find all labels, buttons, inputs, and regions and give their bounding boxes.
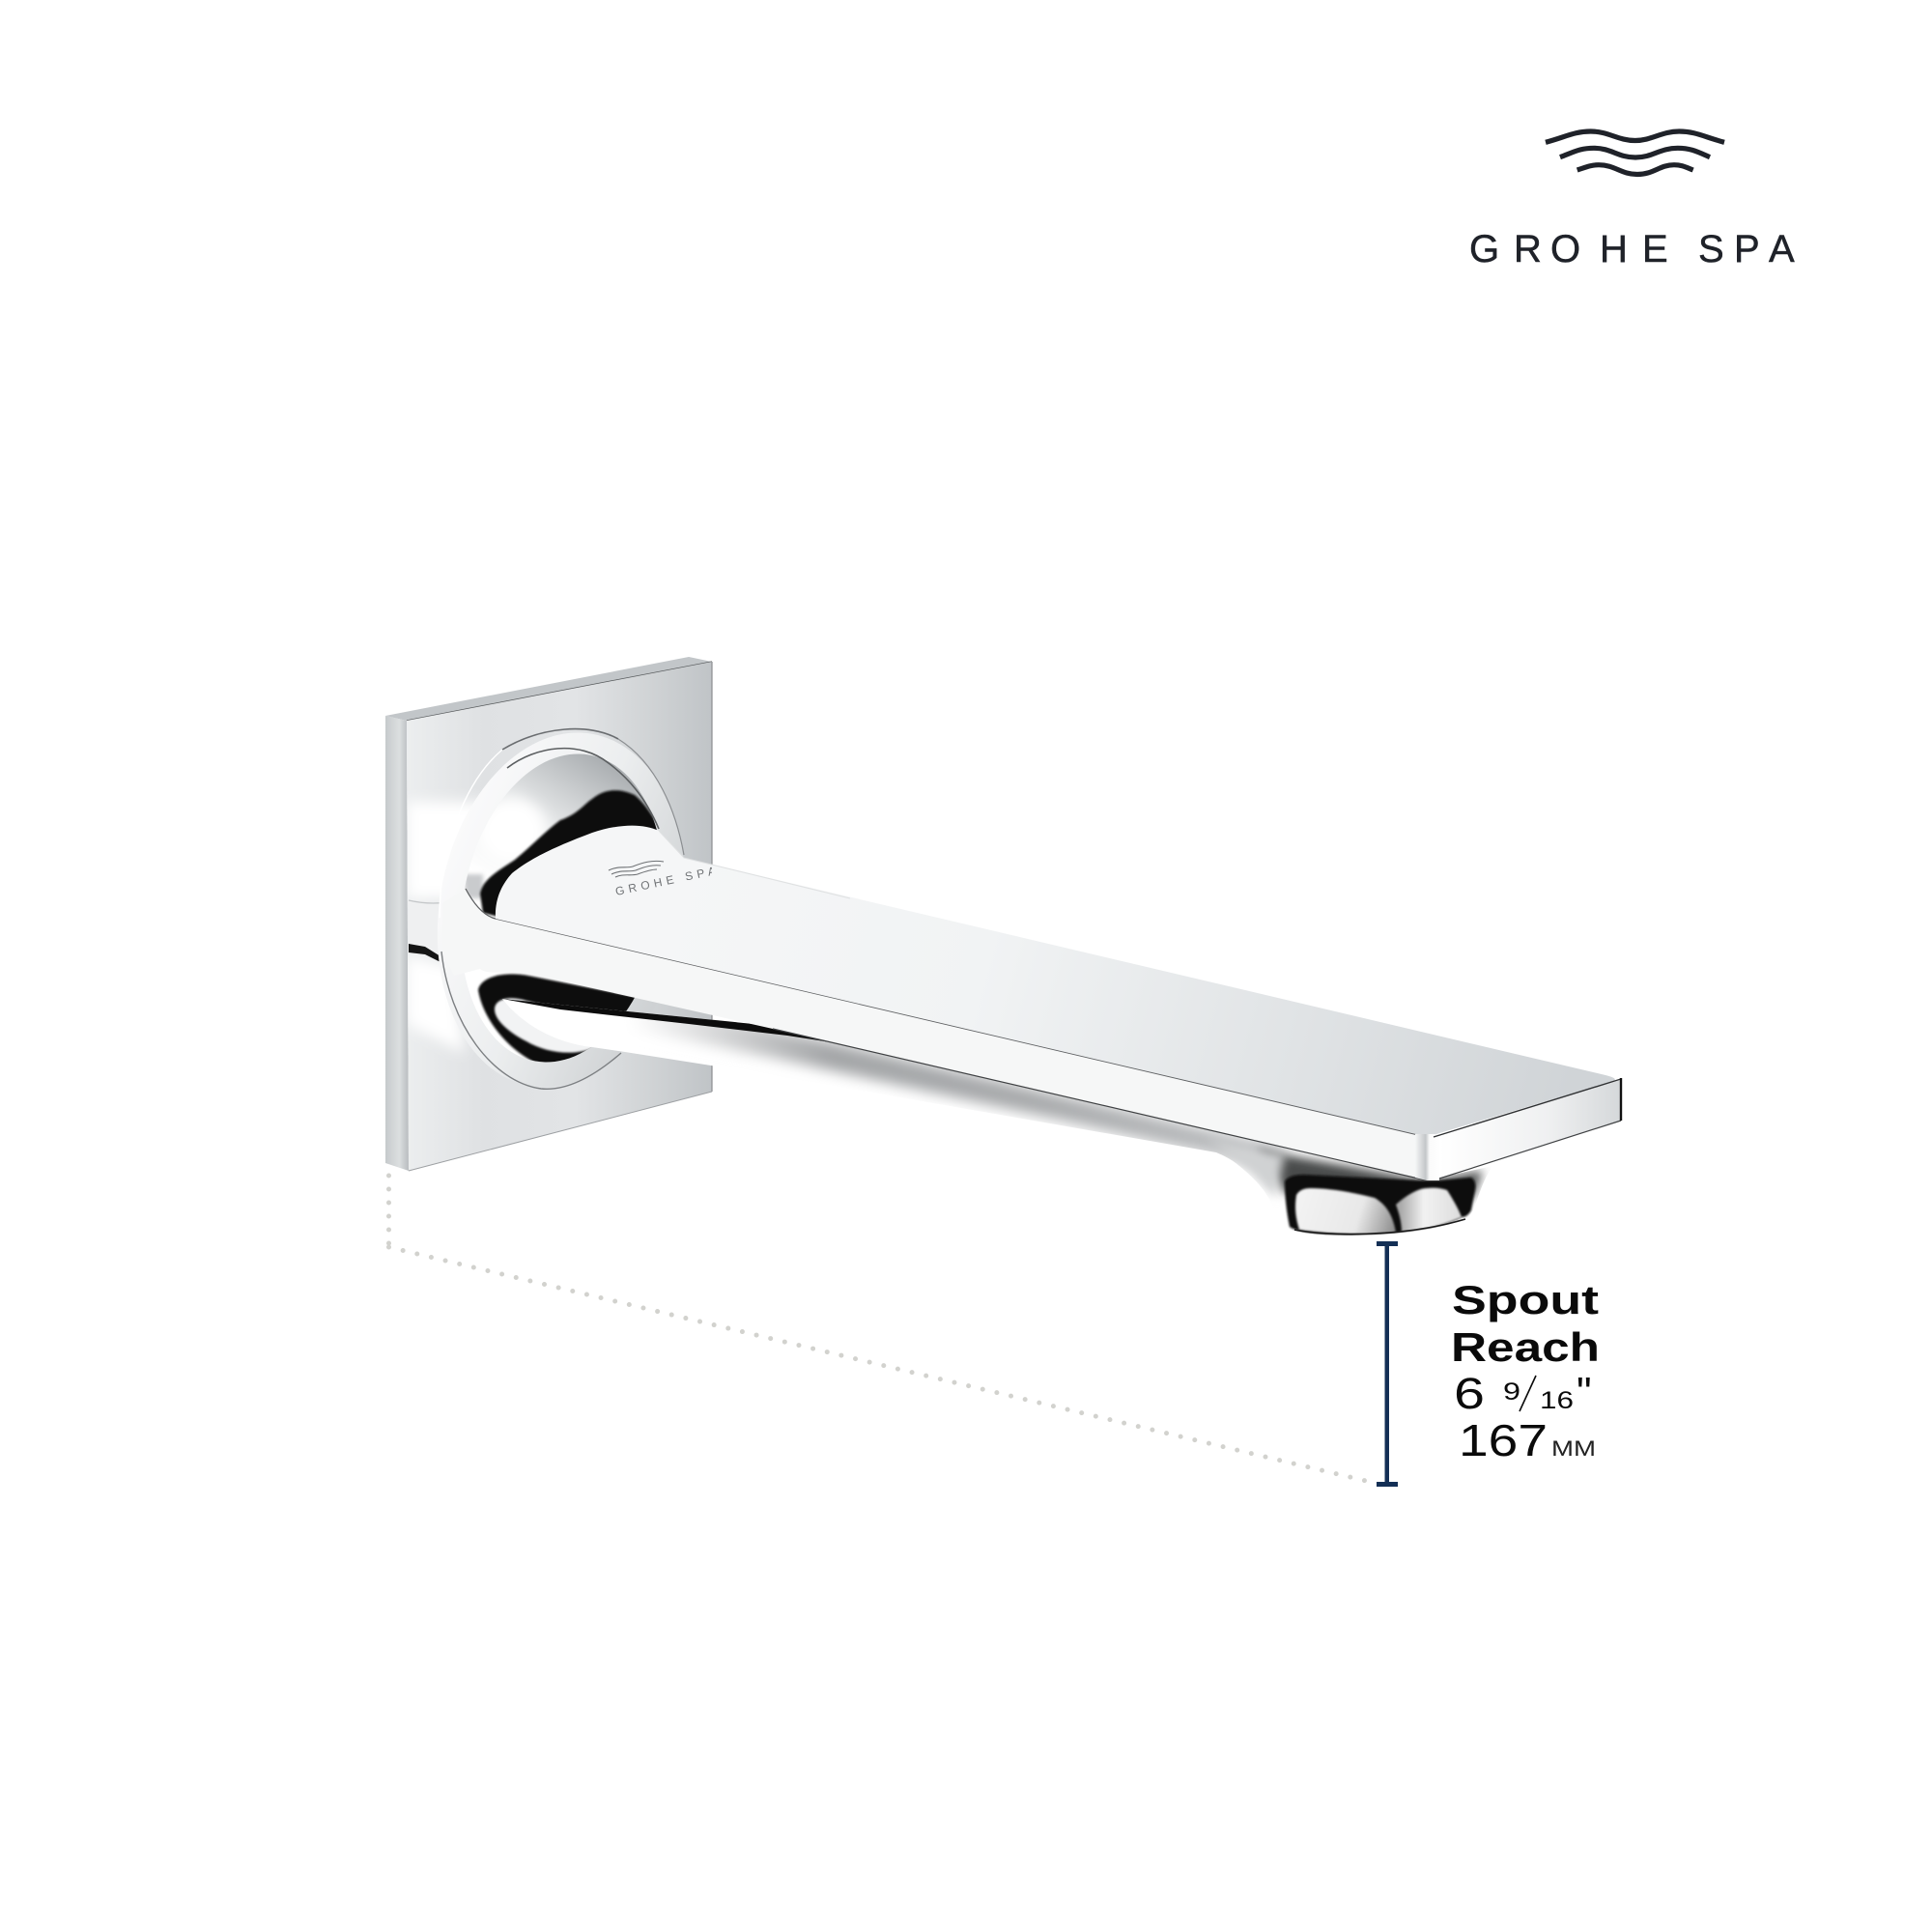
inner ring edge lines xyxy=(507,749,659,829)
imperial measurement xyxy=(1454,1369,1592,1418)
stem on plate xyxy=(409,900,493,980)
product: wall-mounted tub spout xyxy=(385,657,1621,1246)
imperial measurement: " xyxy=(1577,1369,1592,1416)
metric measurement: 167 xyxy=(1459,1415,1548,1465)
aerator bottom edge xyxy=(1294,1219,1465,1234)
icon: three water waves xyxy=(1546,131,1724,174)
imperial measurement: 16 xyxy=(1540,1387,1574,1414)
dimension bar xyxy=(1377,1241,1398,1487)
engraved logo on spout xyxy=(609,860,712,895)
spout end faces xyxy=(1415,1078,1621,1180)
aerator right highlight xyxy=(1396,1188,1462,1233)
escutcheon ring xyxy=(411,713,712,1107)
metric measurement: MM xyxy=(1551,1436,1596,1461)
label title: Spout xyxy=(1452,1277,1599,1322)
spout front strip xyxy=(442,889,1427,1180)
small waves xyxy=(609,861,664,877)
label: spout reach xyxy=(1451,1277,1600,1465)
black reflection lower xyxy=(476,972,635,1063)
black band under spout xyxy=(502,999,827,1041)
label title xyxy=(1451,1277,1600,1370)
logo: GROHE SPA xyxy=(1469,131,1795,270)
mounting plate xyxy=(385,657,712,1171)
label title: Reach xyxy=(1451,1324,1600,1370)
aerator dark band xyxy=(1285,1175,1475,1236)
small brand text: GROHE SPA xyxy=(614,863,721,898)
metric measurement xyxy=(1459,1415,1596,1465)
lower highlight xyxy=(493,997,591,1055)
under body of spout and neck xyxy=(502,999,1488,1236)
black reflection upper xyxy=(480,790,661,918)
brand name: GROHE SPA xyxy=(1469,228,1795,270)
imperial measurement: 6 xyxy=(1454,1369,1485,1418)
imperial measurement: 9 xyxy=(1503,1378,1520,1406)
dome inside ring xyxy=(465,753,657,1063)
dotted reach guide xyxy=(388,1176,1370,1482)
aerator left highlight xyxy=(1295,1188,1396,1235)
spout top plane xyxy=(496,826,1615,1136)
